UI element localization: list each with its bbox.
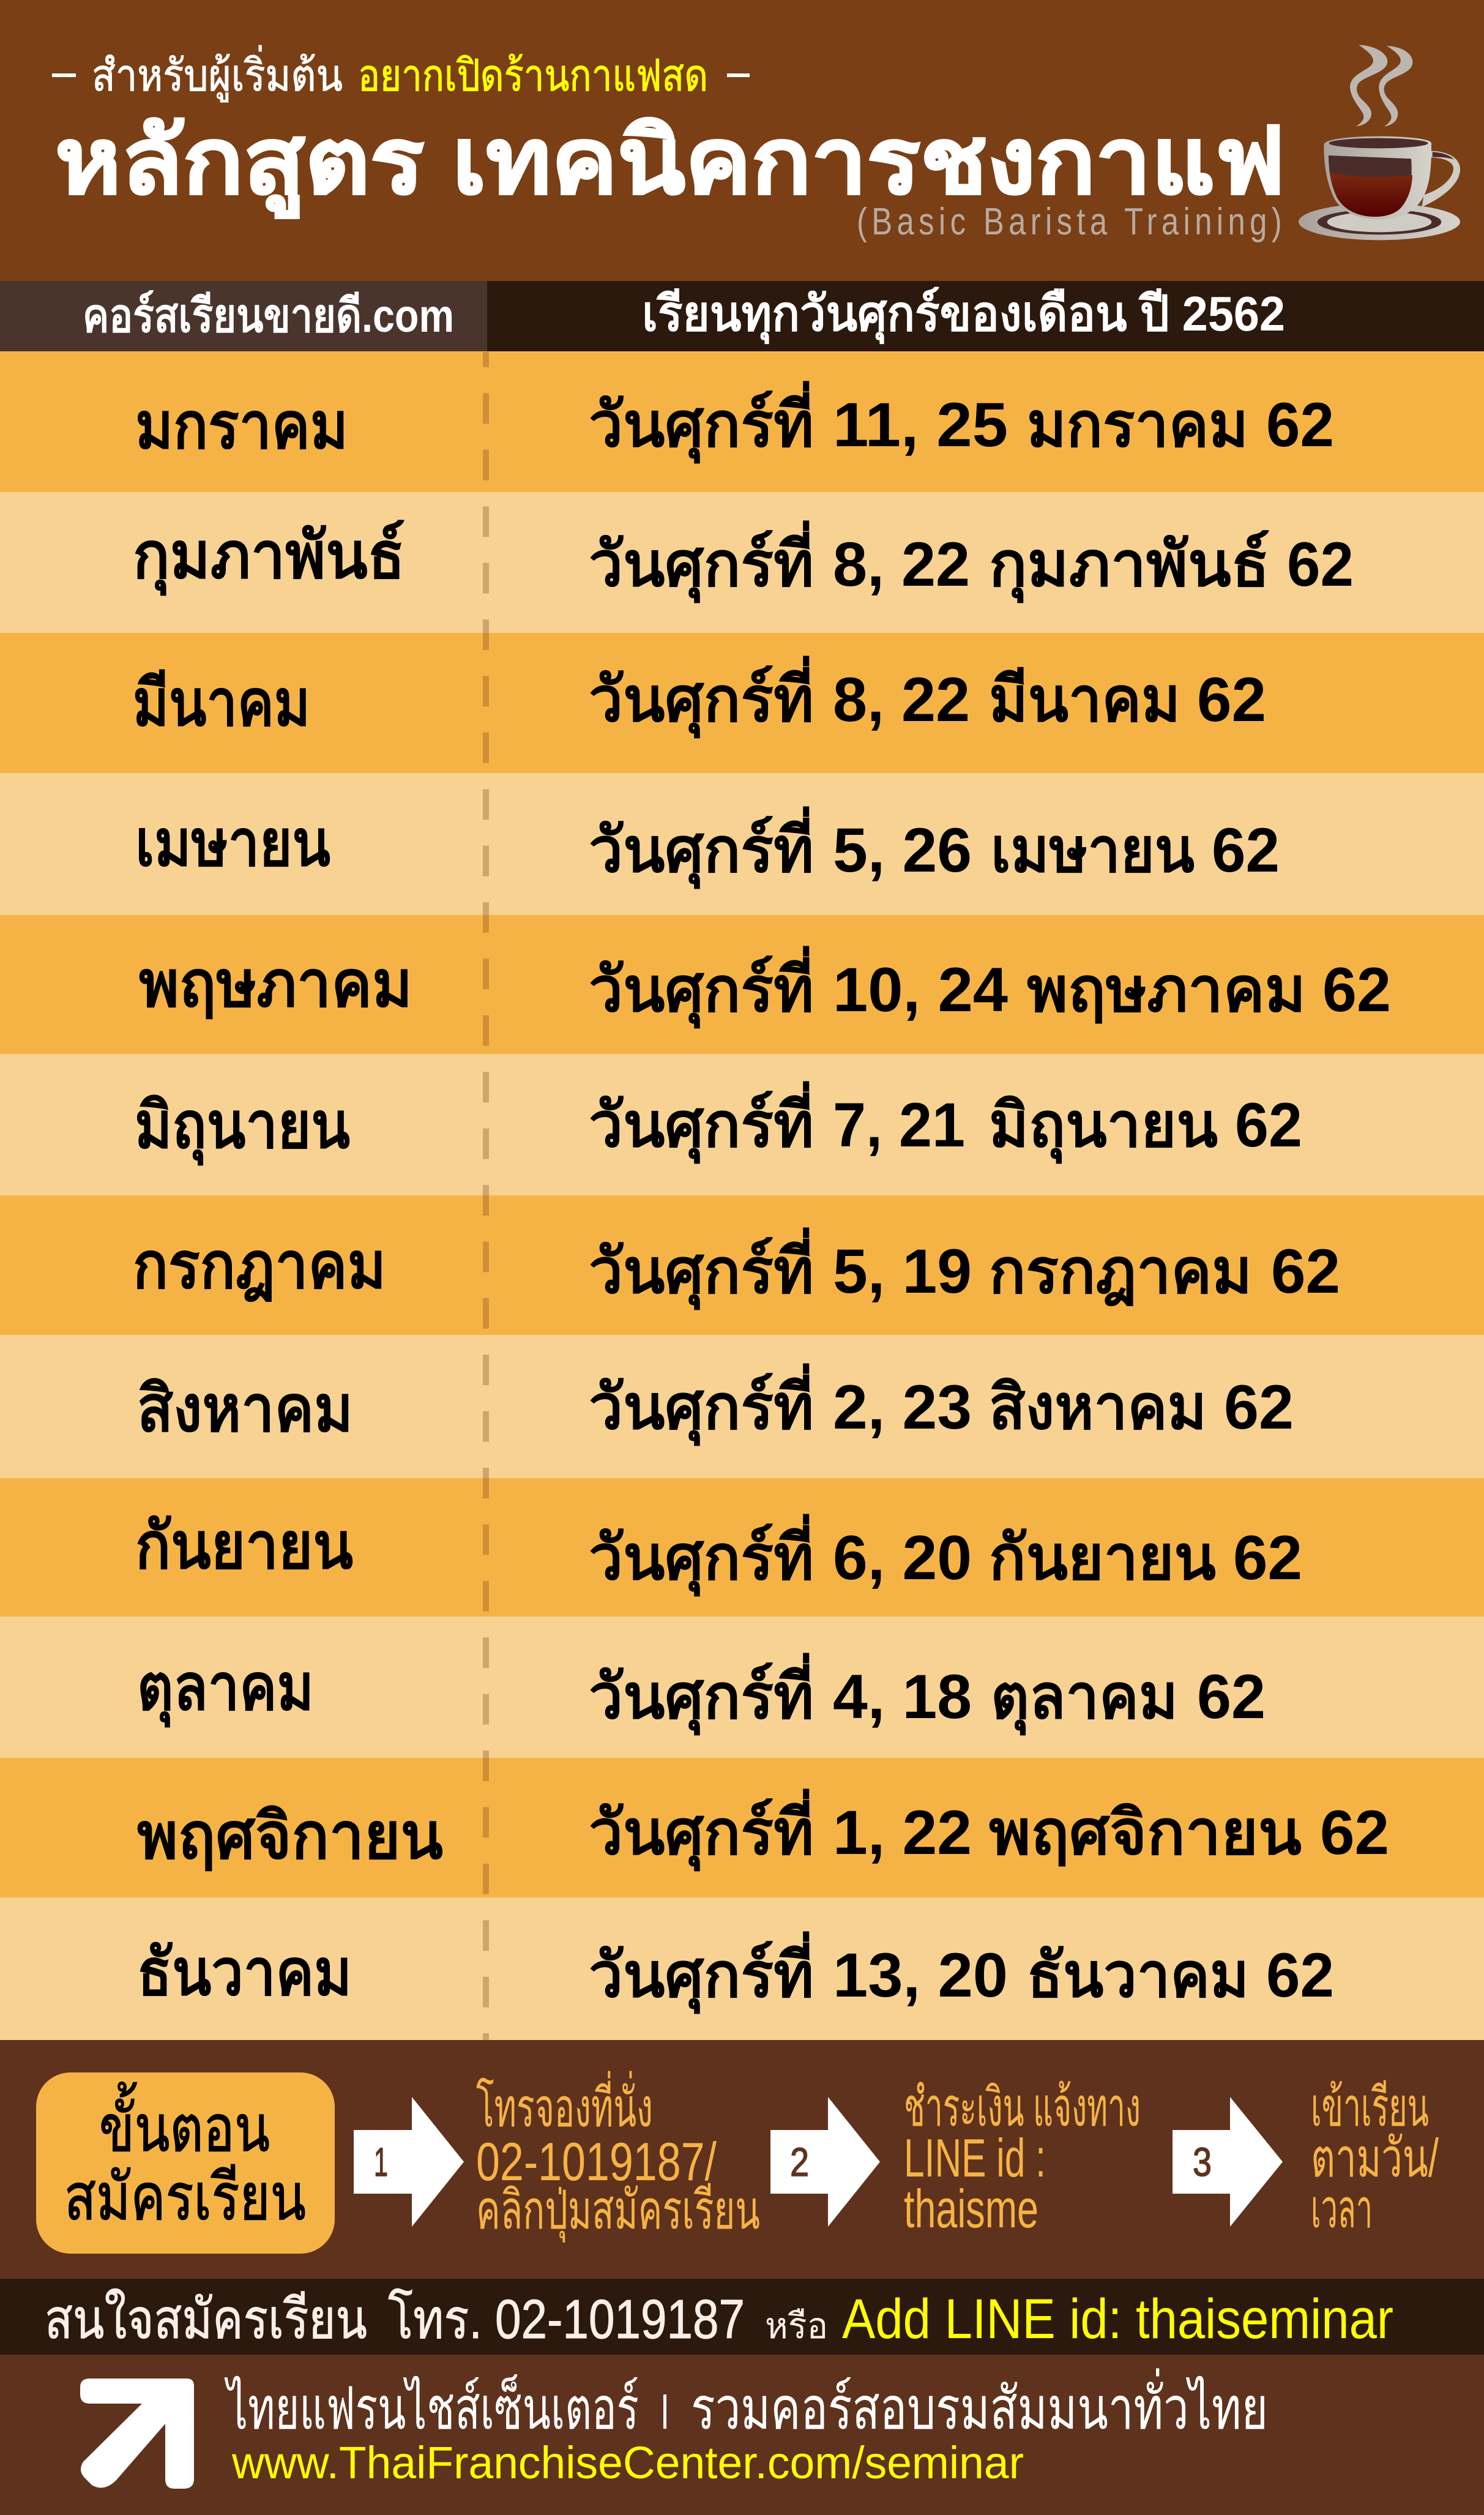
row: December: 62 [1266,1940,1334,2010]
row: August: 62 [1224,1372,1294,1442]
row: April: เมษายน [991,815,1195,885]
text: step 1: โทรจองที่นั่ง [476,2071,653,2138]
text: step 3: เวลา [1311,2178,1373,2239]
row: February: วันศุกร์ที่ [589,520,814,604]
callout: registration steps label [36,2072,335,2254]
row: December: วันศุกร์ที่ [589,1931,814,2014]
row: April: 62 [1212,815,1280,885]
panel: header [0,0,1484,282]
row: November: พฤศจิกายน [989,1798,1302,1867]
row: December [0,1897,1484,2040]
arrow: step 3 [1173,2097,1283,2227]
row: January: วันศุกร์ที่ [589,381,814,464]
row: March: 62 [1197,665,1266,734]
arrow: step 1: 1 [374,2139,388,2184]
row: July: กรกฎาคม [133,1230,386,1302]
callout: registration steps label: ขั้นตอน [99,2082,270,2165]
row: September: กันยายน [135,1510,353,1582]
schedule table [0,351,1484,2040]
row: June: มิถุนายน [135,1089,350,1166]
row: September: กันยายน [989,1523,1216,1593]
row: July: วันศุกร์ที่ [589,1227,814,1310]
row: February: กุมภาพันธ์ [989,529,1270,604]
column header: best-selling courses: คอร์สเรียนขายดี.com [83,290,454,342]
row: September: 62 [1233,1523,1302,1593]
row: November: 1, 22 [833,1798,972,1867]
row: June: มิถุนายน [989,1090,1218,1164]
row: July [0,1195,1484,1335]
text: step 2: LINE id : [904,2128,1046,2188]
row: October: 4, 18 [833,1662,972,1732]
row: June [0,1054,1484,1195]
row: May: พฤษภาคม [139,948,412,1020]
row: September: 6, 20 [833,1523,972,1593]
row: July: 62 [1271,1236,1340,1306]
row: March: มีนาคม [989,665,1180,734]
row: June: 7, 21 [833,1090,965,1160]
title: เทคนิคการชงกาแฟ [452,110,1285,212]
row: October [0,1616,1484,1758]
text: step 2 [904,2077,1141,2239]
row: March: วันศุกร์ที่ [589,656,814,739]
row: February [0,492,1484,633]
row: May [0,915,1484,1054]
row: August: 2, 23 [833,1372,972,1442]
row: January [0,351,1484,492]
row: April: 5, 26 [833,815,972,885]
column header: schedule: เรียนทุกวันศุกร์ของเดือน ปี 2562 [642,286,1285,345]
row: December: ธันวาคม [137,1937,352,2009]
text: step 3 [1311,2077,1439,2239]
row: April: เมษายน [135,807,330,880]
footer brand line: ไทยแฟรนไชส์เซ็นเตอร์ [224,2374,639,2442]
contact band: หรือ [765,2306,828,2346]
row: August [0,1335,1484,1478]
row: October: วันศุกร์ที่ [589,1653,814,1736]
arrow: step 3: 3 [1193,2139,1212,2184]
row: October: ตุลาคม [991,1662,1178,1736]
row: February: 62 [1287,529,1354,599]
contact band: โทร. 02-1019187 [388,2289,745,2350]
header bar [0,281,1484,351]
row: August: สิงหาคม [989,1372,1207,1442]
row: March: 8, 22 [833,665,970,734]
text: step 1: 02-1019187/ [476,2131,717,2192]
footer brand line [224,2368,1268,2442]
panel: footer [0,2355,1484,2515]
column header: schedule [487,281,1484,351]
row: September [0,1478,1484,1616]
row: April [0,773,1484,915]
row: July: 5, 19 [833,1236,972,1306]
row: October: ตุลาคม [137,1651,314,1728]
row: February: 8, 22 [833,529,970,599]
english subtitle: (Basic Barista Training) [857,201,1286,243]
row: January: 62 [1266,390,1334,460]
text: step 1 [476,2071,760,2243]
row: August: วันศุกร์ที่ [589,1363,814,1446]
contact band: Add LINE id: thaiseminar [842,2288,1393,2350]
row: May: 10, 24 [833,955,1008,1025]
text: step 2: thaisme [904,2178,1038,2239]
footer brand line: รวมคอร์สอบรมสัมมนาทั่วไทย [691,2368,1268,2442]
website url: www.ThaiFranchiseCenter.com/seminar [231,2437,1024,2488]
subheading [52,45,750,102]
row: April: วันศุกร์ที่ [589,806,814,889]
subheading: สำหรับผู้เริ่มต้น [92,45,343,102]
subheading: อยากเปิดร้านกาแฟสด [358,51,708,100]
title [55,110,1285,219]
row: June: วันศุกร์ที่ [589,1081,814,1164]
callout: registration steps label: สมัครเรียน [64,2161,306,2233]
row: May: วันศุกร์ที่ [589,946,814,1029]
title: หลักสูตร [55,110,424,219]
row: March [0,633,1484,773]
contact band [0,2279,1484,2355]
panel: registration steps [0,2040,1484,2279]
arrow: step 2: 2 [790,2139,809,2184]
row: November: 62 [1320,1798,1389,1867]
row: February: กุมภาพันธ์ [133,520,405,596]
row: May: 62 [1322,955,1391,1025]
row: August: สิงหาคม [137,1373,353,1445]
row: January: 11, 25 [833,390,1008,460]
arrow: step 1 [354,2097,464,2227]
row: May: พฤษภาคม [1027,955,1306,1025]
text: step 2: ชำระเงิน แจ้งทาง [904,2077,1141,2137]
row: October: 62 [1197,1662,1266,1732]
column header: best-selling courses [0,281,487,351]
text: step 1: คลิกปุ่มสมัครเรียน [476,2180,760,2243]
icon: coffee cup [1299,45,1460,240]
icon: up-right arrow [80,2379,194,2489]
row: June: 62 [1235,1090,1302,1160]
row: December: ธันวาคม [1027,1940,1249,2010]
row: January: มกราคม [1027,390,1248,460]
arrow: step 2 [770,2097,880,2227]
contact band: สนใจสมัครเรียน [45,2289,367,2350]
row: January: มกราคม [135,390,348,462]
row: September: วันศุกร์ที่ [589,1514,814,1597]
row: November: พฤศจิกายน [137,1800,443,1872]
row: March: มีนาคม [133,667,310,739]
row: July: กรกฎาคม [989,1236,1252,1307]
row: November: วันศุกร์ที่ [589,1788,814,1872]
row: November [0,1758,1484,1897]
row: December: 13, 20 [833,1940,1008,2010]
